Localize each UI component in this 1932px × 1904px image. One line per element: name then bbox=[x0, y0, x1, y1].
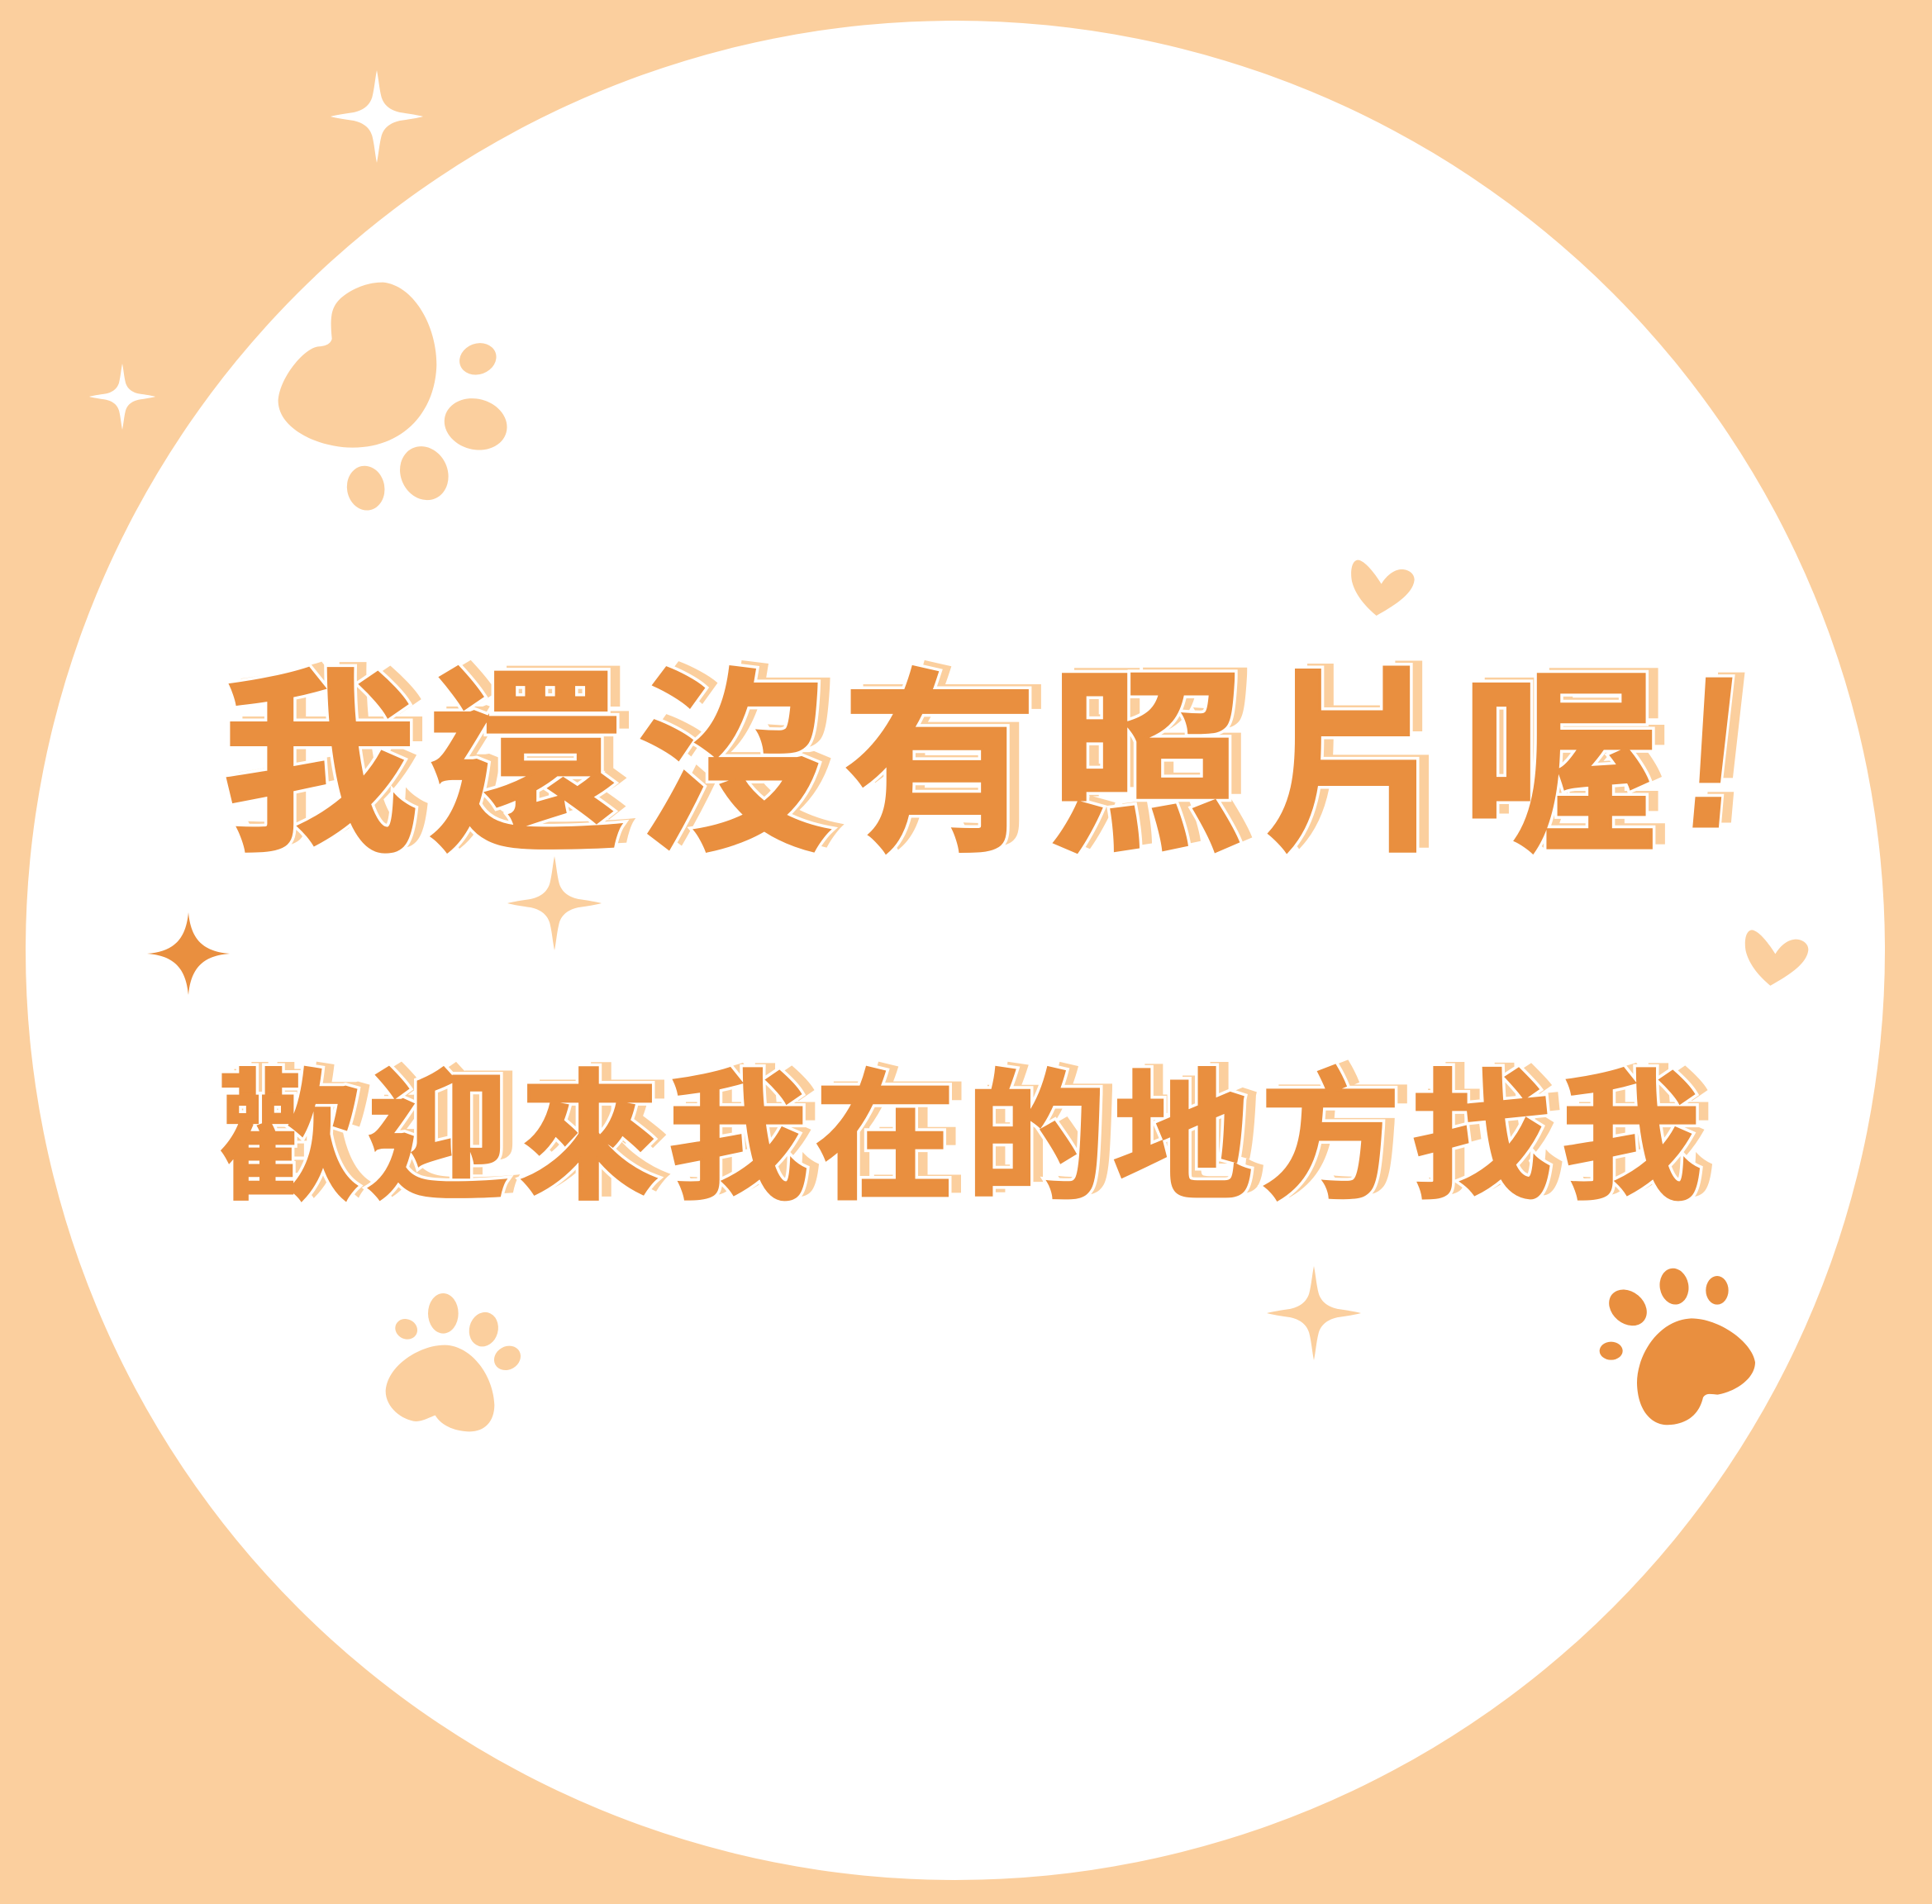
title: main heading with shadow and outline: 我還沒有照片喔 bbox=[221, 657, 1658, 876]
icon: light heart lower bbox=[1745, 930, 1808, 986]
icon: large light paw top left bbox=[278, 283, 513, 513]
icon: orange paw bottom right bbox=[1600, 1266, 1755, 1425]
icon: light sparkle right bbox=[1267, 1266, 1361, 1360]
icon: white sparkle small bbox=[89, 364, 155, 430]
icon: white sparkle large bbox=[331, 70, 423, 163]
icon: light sparkle centre bbox=[507, 856, 602, 950]
subtitle: secondary heading with shadow and outline: 歡迎來我在的地方找我 bbox=[219, 1060, 1701, 1217]
subtitle: secondary heading with shadow and outline: 歡迎來我在的地方找我 bbox=[219, 1060, 1701, 1217]
icon: orange sparkle bbox=[147, 912, 230, 995]
title: main heading with shadow and outline: ! bbox=[1673, 632, 1752, 873]
icon: light paw bottom left bbox=[386, 1293, 525, 1431]
title: main heading with shadow and outline: ! bbox=[1686, 627, 1764, 868]
icon: light heart upper bbox=[1351, 560, 1415, 616]
title: main heading with shadow and outline: 我還沒有照片喔 bbox=[234, 652, 1670, 871]
title: main heading with shadow and outline: 我還沒有照片喔 bbox=[221, 657, 1658, 876]
subtitle: secondary heading with shadow and outline: 歡迎來我在的地方找我 bbox=[231, 1056, 1714, 1213]
title: main heading with shadow and outline: ! bbox=[1673, 632, 1752, 873]
